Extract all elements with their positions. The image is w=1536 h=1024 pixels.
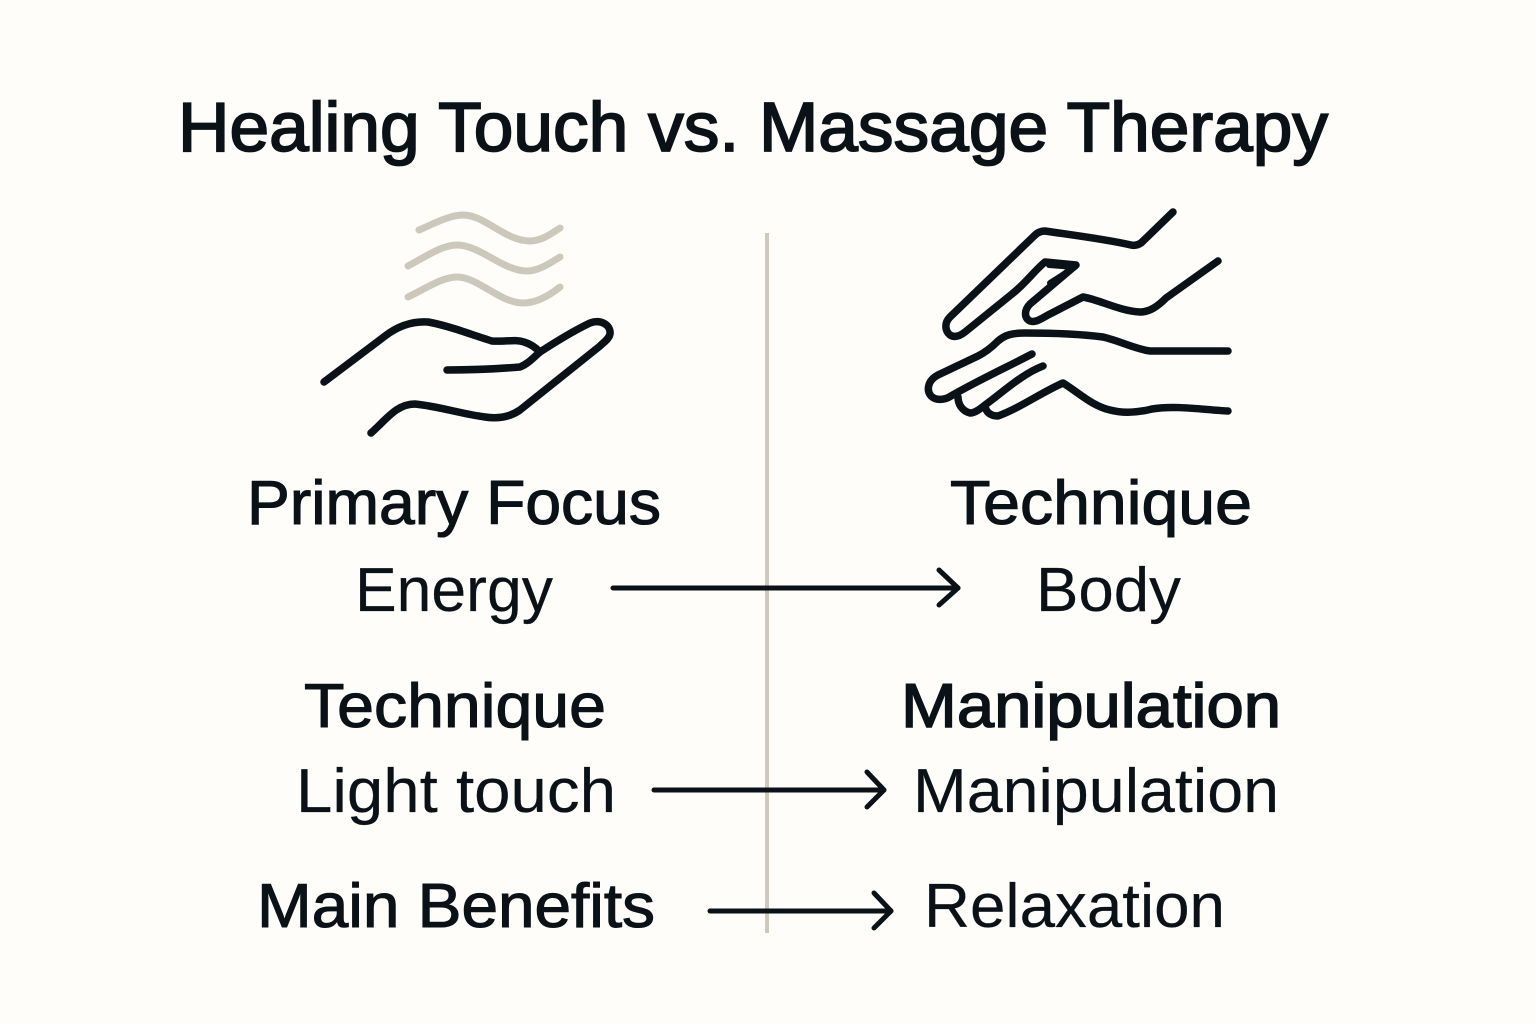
- center divider: [765, 233, 769, 933]
- left column: Technique heading: Technique: [304, 672, 606, 741]
- left label: Main Benefits: Main Benefits: [257, 872, 655, 941]
- upper hand: [946, 212, 1218, 336]
- right column: Technique heading: Technique: [950, 469, 1252, 538]
- arrow: Main Benefits to Relaxation: [710, 893, 891, 928]
- icon: open hand with energy waves: [324, 215, 610, 433]
- left column: Primary Focus heading: Primary Focus: [247, 469, 661, 538]
- icon: massaging hands: [928, 212, 1228, 416]
- lower hand: [928, 333, 1228, 399]
- right column: Manipulation heading: Manipulation: [901, 672, 1281, 741]
- right value: Relaxation: Relaxation: [924, 872, 1225, 941]
- left value: Light touch: Light touch: [296, 757, 616, 826]
- right value: Manipulation: Manipulation: [913, 757, 1279, 826]
- left value: Energy: Energy: [355, 556, 553, 625]
- open hand: [324, 322, 610, 433]
- title: Healing Touch vs. Massage Therapy: [178, 88, 1328, 166]
- energy waves: [408, 215, 560, 303]
- arrow: Light touch to Manipulation: [654, 772, 884, 807]
- right value: Body: Body: [1036, 556, 1181, 625]
- arrow: Energy to Body: [613, 570, 958, 605]
- thick fingertip: [1049, 265, 1075, 283]
